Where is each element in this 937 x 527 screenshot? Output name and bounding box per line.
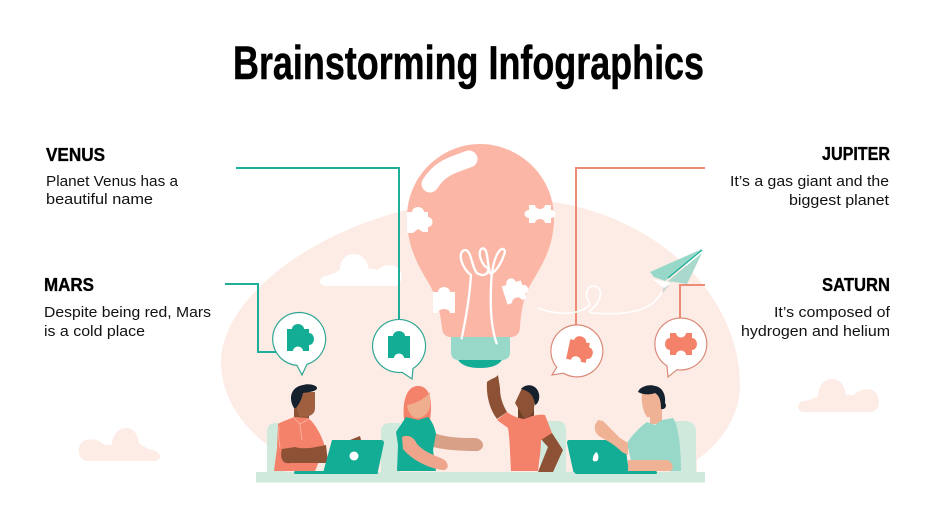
paper plane (650, 249, 702, 293)
laptop base (294, 471, 378, 474)
background blob (221, 198, 740, 472)
puzzle icon (665, 333, 697, 355)
laptop logo (593, 452, 598, 461)
text: Saturn (741, 274, 891, 340)
cloud: pink right (798, 379, 879, 412)
arm (281, 445, 328, 463)
plane white fold (652, 279, 672, 288)
bubble outline (373, 319, 426, 379)
puzzle icon (388, 331, 410, 358)
person 2 (396, 386, 483, 471)
description line 1: Despite being red, Mars (44, 304, 211, 321)
person 4 (595, 385, 681, 471)
puzzle piece: bulb left top (407, 207, 432, 233)
head (515, 388, 536, 418)
speech bubble: Jupiter (551, 325, 603, 377)
hair (521, 385, 539, 405)
heading: MARS (44, 274, 94, 295)
person 3 (487, 375, 563, 472)
speech bubble: Mars (273, 312, 326, 375)
hair (291, 384, 317, 408)
description line 2: hydrogen and helium (741, 323, 890, 340)
bulb base cap (458, 360, 502, 368)
bubble outline (273, 312, 326, 375)
puzzle icon (566, 334, 596, 364)
speech bubble: Saturn (655, 318, 707, 377)
speech bubble: Venus (373, 319, 426, 379)
puzzle piece: bulb right lower (500, 274, 531, 305)
neck (650, 405, 662, 424)
plane lower wing (668, 253, 702, 284)
laptop 2 (567, 440, 657, 474)
heading: JUPITER (822, 143, 890, 164)
shirt (274, 417, 325, 471)
hair (638, 385, 666, 409)
face (407, 392, 430, 418)
bulb glass (407, 144, 554, 337)
title: Brainstorming Infographics (233, 36, 704, 89)
description line 2: biggest planet (789, 192, 890, 209)
description line 1: It’s a gas giant and the (730, 173, 889, 190)
bubble outline (551, 325, 603, 377)
text: Mars (44, 274, 211, 340)
shirt (627, 418, 681, 471)
laptop lid (567, 440, 629, 473)
connector: Jupiter (576, 168, 705, 326)
raised arm (487, 375, 507, 419)
heading: VENUS (46, 144, 105, 165)
chair backs (267, 421, 696, 472)
bulb highlight (430, 159, 469, 184)
cloud: pink left (79, 428, 160, 461)
forearm (628, 460, 673, 471)
table (256, 472, 705, 482)
puzzle piece: bulb right top (524, 205, 556, 223)
cloud: white centre (320, 254, 401, 286)
laptop logo (350, 452, 358, 460)
description line 1: It’s composed of (774, 304, 891, 321)
text: Jupiter (730, 143, 890, 209)
person 1 (274, 384, 328, 471)
bubble outline (655, 318, 707, 377)
connector: Venus (236, 168, 399, 322)
head (296, 392, 315, 417)
description line 1: Planet Venus has a (46, 173, 179, 190)
puzzle icon (287, 324, 314, 351)
paper plane trail (538, 286, 662, 314)
lower arm (538, 433, 563, 472)
bulb base (451, 337, 510, 360)
description line 2: is a cold place (44, 323, 145, 340)
light bulb (407, 144, 556, 368)
hair back (404, 386, 431, 420)
filament (461, 248, 505, 343)
description line 2: beautiful name (46, 191, 153, 208)
plane upper wing (650, 249, 702, 281)
text: Venus (46, 144, 179, 208)
plane shadow (663, 282, 672, 293)
shirt collar (279, 418, 309, 448)
pointing arm (595, 420, 628, 455)
connector: Mars (225, 284, 276, 352)
plane fold (668, 250, 702, 278)
laptop base (575, 471, 657, 474)
head (642, 393, 661, 417)
laptop lid (323, 440, 384, 473)
puzzle piece: bulb left lower (433, 287, 455, 313)
arm (402, 436, 448, 470)
connector: Saturn (680, 285, 705, 319)
laptop hand (350, 436, 361, 440)
heading: SATURN (822, 274, 890, 295)
laptop 1 (294, 436, 384, 474)
shirt (396, 417, 436, 471)
shirt (497, 412, 552, 471)
forearm to hand (430, 432, 483, 451)
neck (518, 408, 534, 420)
neck (294, 405, 309, 425)
